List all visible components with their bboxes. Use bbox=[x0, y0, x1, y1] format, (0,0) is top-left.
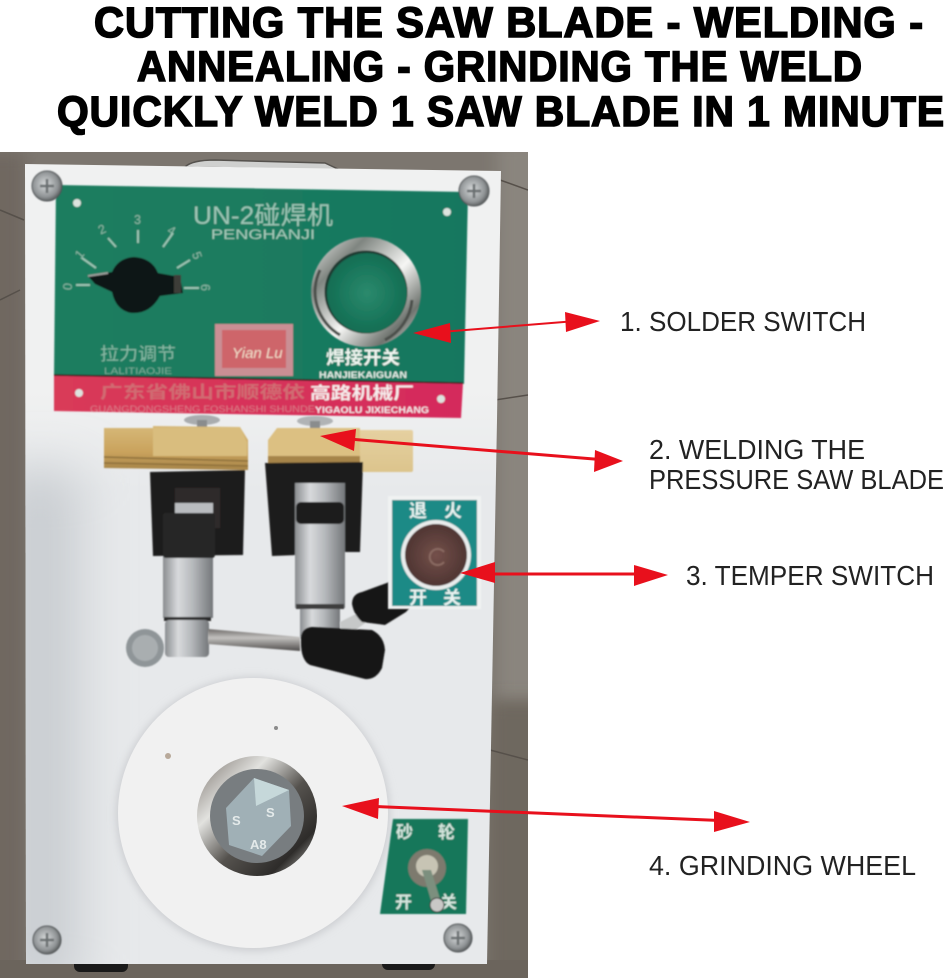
machine panel bbox=[0, 160, 510, 978]
red strip bbox=[54, 375, 463, 418]
label: pressure saw blade bbox=[649, 434, 944, 495]
green control plate: 广东省佛山市顺德依 bbox=[100, 382, 305, 402]
upper cylinder bbox=[295, 483, 345, 608]
dial scale: 3 bbox=[134, 213, 141, 227]
logo sticker bbox=[215, 324, 293, 376]
dial scale: 1 bbox=[72, 247, 87, 262]
green control plate: 高路机械厂 bbox=[310, 383, 414, 403]
black bracket bbox=[150, 470, 245, 556]
temper switch plate: 关 bbox=[443, 588, 461, 608]
grinding wheel switch plate: 关 bbox=[440, 893, 457, 912]
photo: welding machine bbox=[0, 140, 548, 978]
title: ANNEALING - GRINDING THE WELD bbox=[137, 43, 863, 91]
plate captions: 拉力调节 bbox=[100, 344, 176, 364]
concrete backdrop bbox=[0, 140, 548, 978]
green control plate bbox=[54, 185, 468, 418]
plate rivets bbox=[73, 199, 451, 403]
grinding wheel: A8 bbox=[250, 837, 267, 852]
arrow: grinding wheel bbox=[342, 798, 750, 832]
green control plate: 焊接开关 bbox=[326, 348, 400, 368]
temper switch plate: 开 bbox=[409, 588, 427, 608]
green control plate: YIGAOLU JIXIECHANG bbox=[315, 405, 429, 415]
model name: UN-2碰焊机 bbox=[193, 202, 333, 230]
label: solder switch: 1. SOLDER SWITCH bbox=[620, 306, 866, 337]
label: grinding wheel: 4. GRINDING WHEEL bbox=[649, 850, 916, 881]
grinding wheel bbox=[116, 677, 390, 951]
carrying handle bbox=[185, 160, 340, 170]
title: CUTTING THE SAW BLADE - WELDING - bbox=[94, 0, 924, 47]
dial scale: 5 bbox=[189, 250, 205, 261]
temper switch plate: 退 bbox=[409, 501, 427, 521]
label: pressure saw blade: 2. WELDING THE bbox=[649, 434, 865, 465]
left clamp bbox=[104, 415, 248, 657]
grinding wheel switch plate: 砂 bbox=[396, 823, 413, 842]
green control plate: LALITIAOJIE bbox=[104, 366, 172, 377]
grinding wheel switch plate: 开 bbox=[395, 893, 412, 912]
green control plate: Yian Lu bbox=[232, 345, 283, 362]
corner screws bbox=[32, 171, 489, 954]
label: temper switch: 3. TEMPER SWITCH bbox=[686, 560, 934, 591]
rotary knob bbox=[88, 257, 183, 313]
title bbox=[57, 0, 945, 136]
grinding wheel: S bbox=[266, 805, 275, 820]
right clamp bbox=[265, 416, 413, 639]
green control plate: HANJIEKAIGUAN bbox=[319, 370, 407, 380]
green control plate: PENGHANJI bbox=[211, 227, 315, 242]
lower cylinder bbox=[163, 556, 213, 618]
solder switch button bbox=[311, 237, 421, 347]
arrow: pressure saw blade bbox=[320, 429, 623, 472]
rubber feet bbox=[74, 964, 435, 972]
black bracket bbox=[265, 462, 363, 556]
dial scale: 4 bbox=[165, 223, 178, 239]
arrow: solder switch bbox=[413, 312, 600, 343]
dial scale: 6 bbox=[198, 284, 212, 291]
clamp lever bbox=[126, 581, 411, 679]
temper switch plate bbox=[388, 496, 481, 609]
grinding wheel switch plate bbox=[380, 819, 468, 914]
arrow: temper switch bbox=[460, 562, 668, 586]
dial scale: 0 bbox=[61, 282, 75, 291]
dial scale bbox=[61, 213, 212, 291]
temper switch plate: 火 bbox=[444, 501, 462, 521]
green control plate: GUANGDONGSHENG FOSHANSHI SHUNDE bbox=[90, 404, 315, 414]
grinding wheel switch plate: 轮 bbox=[438, 823, 455, 842]
grinding wheel: S bbox=[232, 813, 241, 828]
dial scale: 2 bbox=[96, 222, 108, 237]
